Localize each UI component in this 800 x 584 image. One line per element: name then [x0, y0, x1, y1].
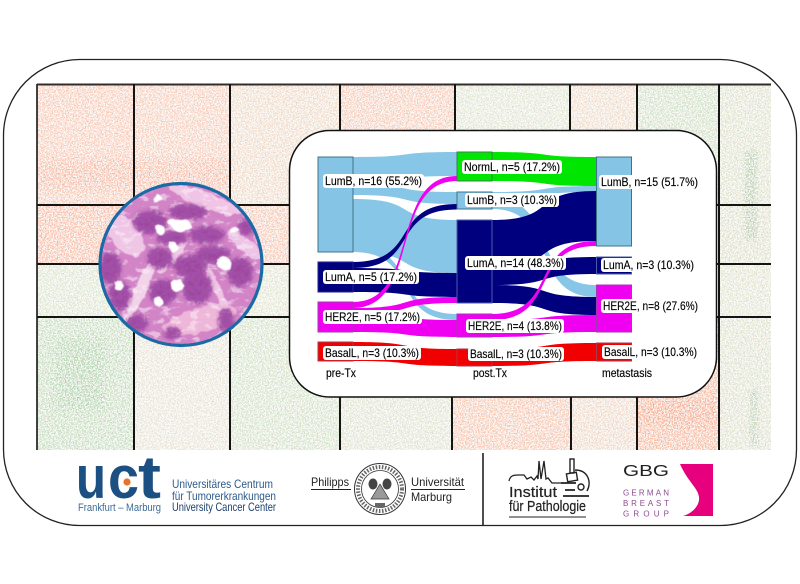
outer rounded frame — [4, 60, 796, 526]
sankey labels: LumA, n=3 (10.3%) — [603, 258, 694, 272]
microscope — [561, 459, 589, 496]
logo: Institut für Pathologie: für Pathologie — [509, 498, 586, 515]
uct name: für Tumorerkrankungen — [172, 489, 276, 503]
logo: Philipps-Universität Marburg: Marburg — [411, 490, 452, 504]
sankey nodes — [318, 152, 632, 366]
sankey axis labels: metastasis — [602, 366, 652, 380]
sankey flows post-Tx to metastasis — [492, 152, 596, 366]
tumour cell clusters — [100, 205, 255, 338]
uct orange dot — [123, 478, 131, 486]
skyline and cathedral — [509, 461, 561, 483]
logo: Philipps-Universität Marburg — [311, 464, 465, 514]
logo: Philipps-Universität Marburg: Philipps — [311, 475, 349, 489]
tumour nuclei texture — [99, 204, 256, 339]
sankey axis labels — [326, 366, 652, 380]
sankey labels: NormL, n=5 (17.2%) — [464, 160, 560, 174]
infographic canvas — [2, 58, 798, 526]
heatmap grid lines — [37, 84, 771, 450]
uct location line: Frankfurt – Marburg — [78, 502, 161, 514]
divider — [482, 453, 484, 525]
uct name — [172, 477, 276, 514]
sankey labels: LumB, n=16 (55.2%) — [325, 174, 422, 188]
sankey labels: BasalL, n=3 (10.3%) — [470, 347, 562, 361]
sankey labels — [323, 160, 700, 361]
panel: sankey chart — [290, 130, 716, 397]
heatmap background — [37, 84, 771, 450]
logo: Institut für Pathologie — [509, 459, 589, 517]
sankey labels: LumA, n=5 (17.2%) — [325, 270, 417, 284]
logo: German Breast Group: BREAST — [623, 499, 669, 508]
sankey axis labels: pre-Tx — [326, 366, 356, 380]
sankey labels: BasalL, n=3 (10.3%) — [325, 346, 419, 360]
university seal — [354, 464, 406, 514]
sankey labels: LumA, n=14 (48.3%) — [467, 256, 564, 270]
logo: UCT — [76, 444, 276, 514]
sankey labels: HER2E, n=5 (17.2%) — [325, 310, 420, 324]
uct wordmark: c — [108, 444, 139, 511]
logo: German Breast Group: GERMAN — [623, 488, 669, 498]
uct name: University Cancer Center — [172, 500, 276, 514]
logo: German Breast Group — [623, 463, 713, 518]
uct wordmark — [76, 444, 161, 511]
uct wordmark: u — [76, 444, 106, 511]
gland lumens — [114, 195, 239, 306]
histology micrograph circle — [98, 179, 266, 347]
sankey axis labels: post.Tx — [473, 366, 507, 380]
sankey flows pre-Tx to post-Tx — [353, 152, 457, 366]
uct wordmark: t — [138, 444, 161, 511]
logo: German Breast Group: GROUP — [623, 510, 669, 518]
sankey labels: BasalL, n=3 (10.3%) — [604, 345, 697, 359]
logo: Institut für Pathologie: Institut — [509, 484, 558, 501]
logo: Philipps-Universität Marburg: Universität — [411, 475, 465, 489]
logo: German Breast Group: GBG — [623, 463, 669, 480]
sankey labels: HER2E, n=4 (13.8%) — [468, 319, 562, 333]
sankey labels: LumB, n=15 (51.7%) — [601, 175, 698, 189]
sankey labels: LumB, n=3 (10.3%) — [467, 193, 557, 207]
pink breast silhouette — [680, 464, 713, 516]
uct name: Universitäres Centrum — [172, 477, 273, 491]
sankey labels: HER2E, n=8 (27.6%) — [603, 299, 698, 313]
